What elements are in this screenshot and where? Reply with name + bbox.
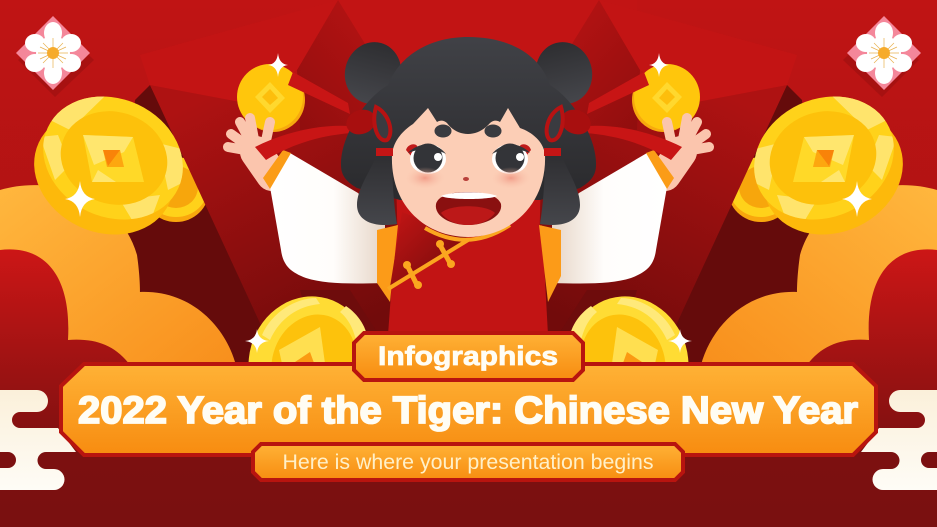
face [392,108,545,237]
main banner shape [61,364,876,455]
left eye [408,144,446,174]
eyebrows [434,124,452,138]
dress [388,225,548,335]
left bow [343,106,390,140]
hair back [341,37,596,200]
tag: subtitle [253,444,683,480]
collar flap [390,212,468,287]
centre fold [300,0,637,340]
right eye [492,144,530,174]
tag: subtitle: Here is where your presentation begins [282,451,654,474]
left pigtail [357,153,397,225]
right bow [547,106,594,140]
banner: top tag backing and main title [61,364,876,455]
tag: Infographics [354,333,583,380]
hair ties [376,148,561,156]
left scenery [0,0,415,490]
collar trim and frogs [388,225,510,289]
title: 2022 Year of the Tiger: Chinese New Year [78,390,858,432]
tag: Infographics: Infographics [378,341,558,371]
right pigtail [540,153,580,225]
nose [463,177,469,181]
eye makeup [406,144,531,156]
mouth [436,192,501,225]
blush [405,167,445,189]
right scenery [522,0,937,490]
orange side trims [377,225,398,302]
character [341,37,596,335]
